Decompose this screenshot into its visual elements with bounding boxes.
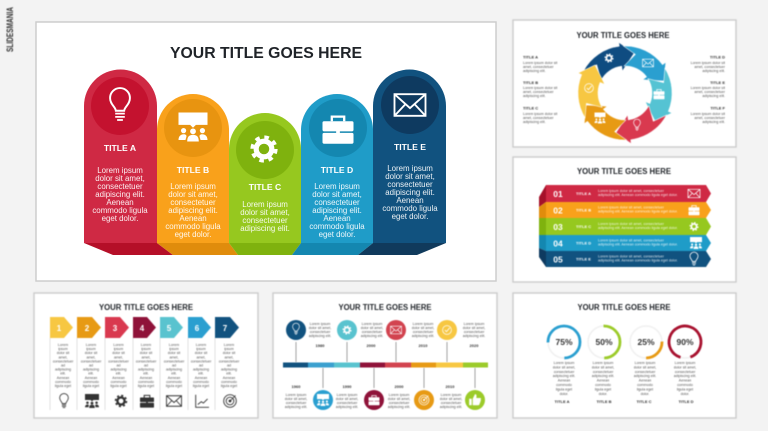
ring 25%: TITLE C — [636, 399, 652, 404]
step 2: elit. — [88, 372, 94, 376]
step 5 — [160, 317, 185, 410]
step 7: Aenean — [223, 376, 235, 380]
ring 90%: Lorem ipsum — [675, 361, 695, 365]
timeline bottom milestones: consectetuer — [441, 401, 462, 405]
main title: YOUR TITLE GOES HERE — [170, 45, 362, 62]
step 2: Lorem — [86, 343, 96, 347]
ribbon 01 — [539, 185, 711, 207]
column B — [157, 94, 238, 255]
ring 50%: 50% — [595, 337, 613, 347]
step 2: ligula eget — [83, 384, 99, 388]
timeline bottom milestones: Lorem ipsum — [389, 393, 409, 397]
timeline bottom milestones: adipiscing elit. — [440, 405, 462, 409]
step 3: amet, — [114, 355, 123, 359]
column E: TITLE E — [394, 142, 426, 152]
ring 50%: commodo — [595, 383, 611, 387]
timeline top milestones: Lorem ipsum — [310, 322, 330, 326]
column B: dolor sit amet, — [168, 190, 218, 199]
column B: TITLE B — [177, 165, 209, 175]
ring 75%: Aenean — [558, 379, 570, 383]
timeline top milestones: adipiscing elit. — [361, 334, 383, 338]
ribbon 03: adipiscing elit. Aenean commodo ligula eget dolor. — [598, 226, 678, 230]
step 1: ipsum — [58, 347, 68, 351]
ring 25%: dolor. — [641, 392, 649, 396]
column B: consectetuer — [170, 198, 216, 207]
step 7: Lorem — [224, 343, 234, 347]
step 2: dolor sit — [85, 351, 97, 355]
ring 25%: 25% — [637, 337, 655, 347]
column E: dolor sit amet, — [385, 172, 435, 181]
panel: main slide with five columns — [36, 22, 496, 281]
column A: eget dolor. — [102, 214, 138, 223]
timeline bottom milestones: Lorem ipsum — [441, 393, 461, 397]
timeline top milestones — [286, 320, 485, 348]
step 7: 7 — [223, 324, 228, 333]
timeline top milestones: 2010 — [419, 343, 428, 348]
ring 50%: Aenean — [597, 379, 609, 383]
timeline top milestones: adipiscing elit. — [309, 334, 331, 338]
ring 25% — [630, 326, 662, 404]
timeline bottom milestones — [285, 384, 485, 410]
panel: numbered ribbons — [513, 157, 736, 282]
ring 50%: dolor sit amet, — [592, 365, 614, 369]
timeline bottom milestones: dolor sit amet, — [336, 397, 358, 401]
cycle left labels: amet, consectetuer — [523, 65, 554, 69]
timeline bottom milestones: 2010 — [446, 384, 455, 389]
step 4: elit. — [143, 372, 149, 376]
timeline bar — [283, 362, 488, 368]
cycle left labels: adipiscing elit. — [523, 69, 546, 73]
step 7: dolor sit — [223, 351, 235, 355]
step 6: commodo — [193, 380, 209, 384]
step 7: ipsum — [224, 347, 234, 351]
column A: commodo ligula — [92, 206, 148, 215]
cycle right labels: adipiscing elit. — [702, 120, 725, 124]
step 7: adipiscing — [221, 368, 237, 372]
timeline bottom milestones: adipiscing elit. — [388, 405, 410, 409]
ring 50%: dolor. — [599, 392, 607, 396]
cycle right labels: Lorem ipsum dolor sit — [691, 112, 725, 116]
column A: dolor sit amet, — [95, 174, 145, 183]
ribbon 04: Lorem ipsum dolor sit amet, consectetuer — [598, 238, 665, 242]
column E: Aenean — [396, 196, 424, 205]
cycle left labels: Lorem ipsum dolor sit — [523, 86, 557, 90]
step 1: 1 — [57, 324, 62, 333]
ring 75%: 75% — [555, 337, 573, 347]
timeline bottom milestones: consectetuer — [286, 401, 307, 405]
ring 90%: dolor sit amet, — [674, 365, 696, 369]
column C: consectetuer — [242, 216, 288, 225]
step 1: consectetuer — [53, 359, 74, 363]
column D: dolor sit amet, — [312, 190, 362, 199]
ribbon 05 — [539, 248, 711, 267]
step 4: commodo — [138, 380, 154, 384]
column B: commodo ligula — [165, 222, 221, 231]
column E: commodo ligula — [382, 204, 438, 213]
step 7: commodo — [221, 380, 237, 384]
ribbon 05: Lorem ipsum dolor sit amet, consectetuer — [598, 254, 665, 258]
timeline bottom milestones: adipiscing elit. — [336, 405, 358, 409]
ring 75%: adipiscing elit. — [553, 374, 575, 378]
panel: seven numbered steps — [34, 293, 258, 418]
step 5: Lorem — [169, 343, 179, 347]
ribbon 01: adipiscing elit. Aenean commodo ligula eget dolor. — [598, 193, 678, 197]
ring 25%: consectetuer — [635, 370, 656, 374]
step 2: 2 — [85, 324, 90, 333]
step 5: ligula eget — [166, 384, 182, 388]
step 5: 5 — [167, 324, 172, 333]
cycle left labels: adipiscing elit. — [523, 94, 546, 98]
ribbon 02: Lorem ipsum dolor sit amet, consectetuer — [598, 206, 665, 210]
ring 75%: Lorem ipsum — [554, 361, 574, 365]
column C: dolor sit amet, — [240, 208, 290, 217]
panel: cycle diagram — [513, 20, 736, 150]
ribbon 02: adipiscing elit. Aenean commodo ligula eget dolor. — [598, 210, 678, 214]
cycle title: YOUR TITLE GOES HERE — [576, 31, 670, 40]
cycle left labels: TITLE A — [523, 54, 538, 60]
step 2: amet, — [86, 355, 96, 359]
step 4 — [133, 317, 157, 410]
timeline bottom milestones: 1960 — [292, 384, 301, 389]
cycle right labels: amet, consectetuer — [694, 65, 726, 69]
column D: eget dolor. — [319, 230, 355, 239]
step 1: commodo — [55, 380, 71, 384]
ring 90%: consectetuer — [675, 370, 696, 374]
ring 25%: commodo — [637, 383, 653, 387]
cycle right labels: TITLE F — [710, 106, 726, 110]
cycle left labels: Lorem ipsum dolor sit — [523, 61, 557, 65]
step 6: Aenean — [195, 376, 207, 380]
step 3: ligula eget — [110, 384, 127, 388]
column A: adipiscing elit. — [95, 190, 145, 199]
column D: adipiscing elit. — [312, 206, 362, 215]
cycle right labels: Lorem ipsum dolor sit — [691, 86, 725, 90]
column B: Aenean — [179, 214, 207, 223]
step 6 — [188, 317, 212, 410]
timeline top milestones: consectetuer — [362, 330, 383, 334]
column E: eget dolor. — [392, 212, 428, 221]
step 1: ligula eget — [55, 384, 71, 388]
step 4: Lorem — [141, 343, 151, 347]
step 6: dolor sit — [195, 351, 207, 355]
ribbon 02: TITLE B — [576, 208, 591, 212]
timeline top milestones: dolor sit amet, — [412, 326, 434, 330]
cycle right labels: Lorem ipsum dolor sit — [691, 61, 725, 65]
ribbon 04: 04 — [553, 238, 563, 248]
cycle left labels: TITLE C — [523, 106, 538, 110]
step 5: Aenean — [168, 376, 180, 380]
panel: percentage rings — [513, 293, 736, 418]
ribbon 05: TITLE E — [576, 256, 591, 262]
cycle right labels: adipiscing elit. — [702, 69, 725, 73]
column B: adipiscing elit. — [168, 206, 218, 215]
ring 25%: ligula eget — [637, 387, 653, 391]
step 5: ipsum — [169, 347, 179, 351]
step 4: amet, — [142, 355, 150, 359]
column A: consectetuer — [97, 182, 143, 191]
timeline top milestones: 2020 — [470, 343, 479, 348]
step 3: Lorem — [113, 343, 124, 347]
ring 75%: dolor sit amet, — [553, 365, 575, 369]
timeline top milestones: Lorem ipsum — [362, 322, 382, 326]
step 1: adipiscing — [55, 368, 71, 372]
step 2: consectetuer — [81, 359, 102, 363]
column C: TITLE C — [249, 182, 281, 192]
ring 75%: consectetuer — [554, 370, 575, 374]
step 5: elit. — [171, 372, 177, 376]
step 3: ipsum — [114, 347, 123, 351]
step 4: Aenean — [140, 376, 152, 380]
step 3 — [105, 317, 130, 410]
step 1: elit. — [60, 372, 66, 376]
ring 75%: dolor. — [560, 392, 568, 396]
step 3: dolor sit — [112, 351, 125, 355]
ring 90%: 90% — [676, 337, 694, 347]
ribbon 04 — [539, 235, 711, 251]
step 2: adipiscing — [83, 368, 99, 372]
column A — [84, 70, 173, 255]
timeline bottom milestones: consectetuer — [389, 401, 410, 405]
step 7: ad — [227, 364, 231, 368]
timeline top milestones: consectetuer — [413, 330, 434, 334]
ring 90% — [665, 322, 705, 404]
step 4: ipsum — [141, 347, 151, 351]
timeline bottom milestones: Lorem ipsum — [286, 393, 306, 397]
step 6: adipiscing — [193, 368, 209, 372]
ring 50%: Lorem ipsum — [593, 361, 613, 365]
cycle right labels — [691, 54, 726, 124]
column E — [358, 69, 446, 255]
column C: adipiscing elit. — [240, 224, 290, 233]
timeline top milestones: dolor sit amet, — [361, 326, 383, 330]
step 5: adipiscing — [166, 368, 182, 372]
timeline top milestones: adipiscing elit. — [412, 334, 434, 338]
column E: Lorem ipsum — [387, 164, 433, 173]
step 3: ad — [116, 364, 120, 368]
step 1: amet, — [58, 355, 68, 359]
step 2 — [77, 317, 102, 410]
cycle left labels — [523, 54, 557, 124]
timeline top milestones: consectetuer — [464, 330, 485, 334]
timeline connectors — [296, 342, 475, 388]
timeline bottom milestones: dolor sit amet, — [388, 397, 410, 401]
step 4: adipiscing — [138, 368, 154, 372]
step 3: elit. — [116, 372, 121, 376]
step 2: ipsum — [86, 347, 96, 351]
column E: consectetuer — [387, 180, 433, 189]
ribbon 01: TITLE A — [576, 191, 591, 196]
step 5: dolor sit — [168, 351, 180, 355]
step 5: amet, — [170, 355, 178, 359]
step 3: Aenean — [112, 376, 125, 380]
ring 75% — [548, 326, 580, 404]
step 7: elit. — [226, 372, 232, 376]
ring 90%: ligula eget — [677, 387, 693, 391]
step 2: commodo — [83, 380, 99, 384]
step 6: ipsum — [196, 347, 206, 351]
cycle right labels: amet, consectetuer — [694, 90, 726, 94]
column D — [292, 94, 373, 255]
ring 90%: adipiscing elit. — [674, 374, 696, 378]
ring 50%: adipiscing elit. — [592, 374, 614, 378]
column C — [229, 113, 301, 255]
ribbon 03: TITLE C — [576, 224, 591, 229]
ring 25%: Aenean — [639, 379, 651, 383]
timeline bottom milestones: Lorem ipsum — [337, 393, 357, 397]
step 4: ad — [144, 364, 148, 368]
column A: Aenean — [106, 198, 134, 207]
step 7: amet, — [224, 355, 234, 359]
step 7 — [215, 317, 240, 410]
step 5: ad — [172, 364, 176, 368]
panel: timeline — [273, 293, 497, 418]
cycle arrows ring — [559, 36, 691, 150]
step 3: commodo — [111, 380, 126, 384]
column D: consectetuer — [314, 198, 360, 207]
step 2: ad — [89, 364, 93, 368]
timeline bottom milestones: dolor sit amet, — [440, 397, 462, 401]
ribbon 02 — [539, 202, 711, 218]
step 3: adipiscing — [111, 368, 126, 372]
step 6: Lorem — [196, 343, 206, 347]
timeline bottom milestones: consectetuer — [337, 401, 358, 405]
cycle left labels: Lorem ipsum dolor sit — [523, 112, 557, 116]
column B: Lorem ipsum — [170, 182, 216, 191]
ring 90%: TITLE D — [678, 399, 694, 404]
column A: TITLE A — [104, 143, 136, 153]
timeline bottom milestones: 1990 — [343, 384, 352, 389]
cycle left labels: TITLE B — [523, 80, 538, 85]
step 4: dolor sit — [140, 351, 152, 355]
ribbon 03 — [539, 218, 711, 235]
step 4: 4 — [140, 324, 145, 333]
timeline top milestones: 1980 — [316, 343, 325, 348]
steps title: YOUR TITLE GOES HERE — [99, 303, 194, 312]
timeline bottom milestones: adipiscing elit. — [285, 405, 307, 409]
ring 50%: consectetuer — [593, 370, 614, 374]
step 7: ligula eget — [221, 384, 237, 388]
column D: Lorem ipsum — [314, 182, 360, 191]
ring 50%: ligula eget — [595, 387, 611, 391]
ring 25%: Lorem ipsum — [635, 361, 655, 365]
column D: commodo ligula — [309, 222, 365, 231]
column D: Aenean — [323, 214, 351, 223]
timeline top milestones: dolor sit amet, — [463, 326, 485, 330]
timeline bottom milestones: 2000 — [395, 384, 404, 389]
ring 50%: TITLE B — [596, 399, 612, 404]
step 3: consectetuer — [108, 359, 130, 363]
ring 90%: dolor. — [681, 392, 689, 396]
ribbon 04: adipiscing elit. Aenean commodo ligula eget dolor. — [598, 243, 678, 247]
step 6: 6 — [195, 324, 200, 333]
step 6: consectetuer — [191, 359, 212, 363]
column C: Lorem ipsum — [242, 200, 288, 209]
ring 75%: commodo — [556, 383, 572, 387]
timeline title: YOUR TITLE GOES HERE — [338, 303, 432, 312]
timeline top milestones: Lorem ipsum — [464, 322, 484, 326]
step 7: consectetuer — [219, 359, 240, 363]
ribbon 04: TITLE D — [576, 240, 591, 246]
ribbon 01: Lorem ipsum dolor sit amet, consectetuer — [598, 189, 665, 193]
column B: eget dolor. — [175, 230, 211, 239]
column E: adipiscing elit. — [385, 188, 435, 197]
step 5: commodo — [166, 380, 182, 384]
cycle right labels: TITLE E — [710, 80, 725, 85]
cycle left labels: amet, consectetuer — [523, 90, 554, 94]
step 6: ad — [199, 364, 203, 368]
cycle right labels: adipiscing elit. — [702, 94, 725, 98]
timeline top milestones: consectetuer — [310, 330, 331, 334]
column D: TITLE D — [321, 165, 353, 175]
step 4: ligula eget — [138, 384, 154, 388]
step 6: ligula eget — [193, 384, 209, 388]
ribbons title: YOUR TITLE GOES HERE — [577, 167, 672, 176]
cycle left labels: adipiscing elit. — [523, 120, 546, 124]
ribbon 02: 02 — [553, 206, 563, 216]
ribbon 05: adipiscing elit. Aenean commodo ligula eget dolor. — [598, 259, 678, 263]
timeline top milestones: dolor sit amet, — [309, 326, 331, 330]
timeline top milestones: 2000 — [367, 343, 376, 348]
ribbon 03: Lorem ipsum dolor sit amet, consectetuer — [598, 222, 665, 226]
step 6: amet, — [196, 355, 206, 359]
step 3: 3 — [113, 324, 118, 333]
step 1 — [50, 317, 74, 410]
ring 75%: TITLE A — [555, 399, 570, 404]
step 1: ad — [61, 364, 65, 368]
step 4: consectetuer — [136, 359, 157, 363]
step 1: dolor sit — [57, 351, 69, 355]
cycle right labels: amet, consectetuer — [694, 116, 726, 120]
cycle right labels: TITLE D — [710, 54, 725, 60]
ring 50% — [588, 326, 620, 404]
step 2: Aenean — [85, 376, 97, 380]
ring 75%: ligula eget — [556, 387, 572, 391]
step 1: Aenean — [57, 376, 69, 380]
ring 25%: adipiscing elit. — [634, 374, 656, 378]
step 6: elit. — [198, 372, 204, 376]
ring 25%: dolor sit amet, — [634, 365, 656, 369]
ring 90%: commodo — [677, 383, 693, 387]
timeline bottom milestones: dolor sit amet, — [285, 397, 307, 401]
ring 90%: Aenean — [679, 379, 691, 383]
rings title: YOUR TITLE GOES HERE — [578, 303, 671, 312]
timeline top milestones: adipiscing elit. — [463, 334, 485, 338]
ribbon 03: 03 — [553, 222, 563, 232]
ribbon 05: 05 — [553, 254, 563, 264]
step 5: consectetuer — [164, 359, 185, 363]
timeline top milestones: Lorem ipsum — [413, 322, 433, 326]
ribbon 01: 01 — [553, 189, 563, 199]
cycle left labels: amet, consectetuer — [523, 116, 554, 120]
column A: Lorem ipsum — [97, 166, 143, 175]
step 1: Lorem — [58, 343, 68, 347]
